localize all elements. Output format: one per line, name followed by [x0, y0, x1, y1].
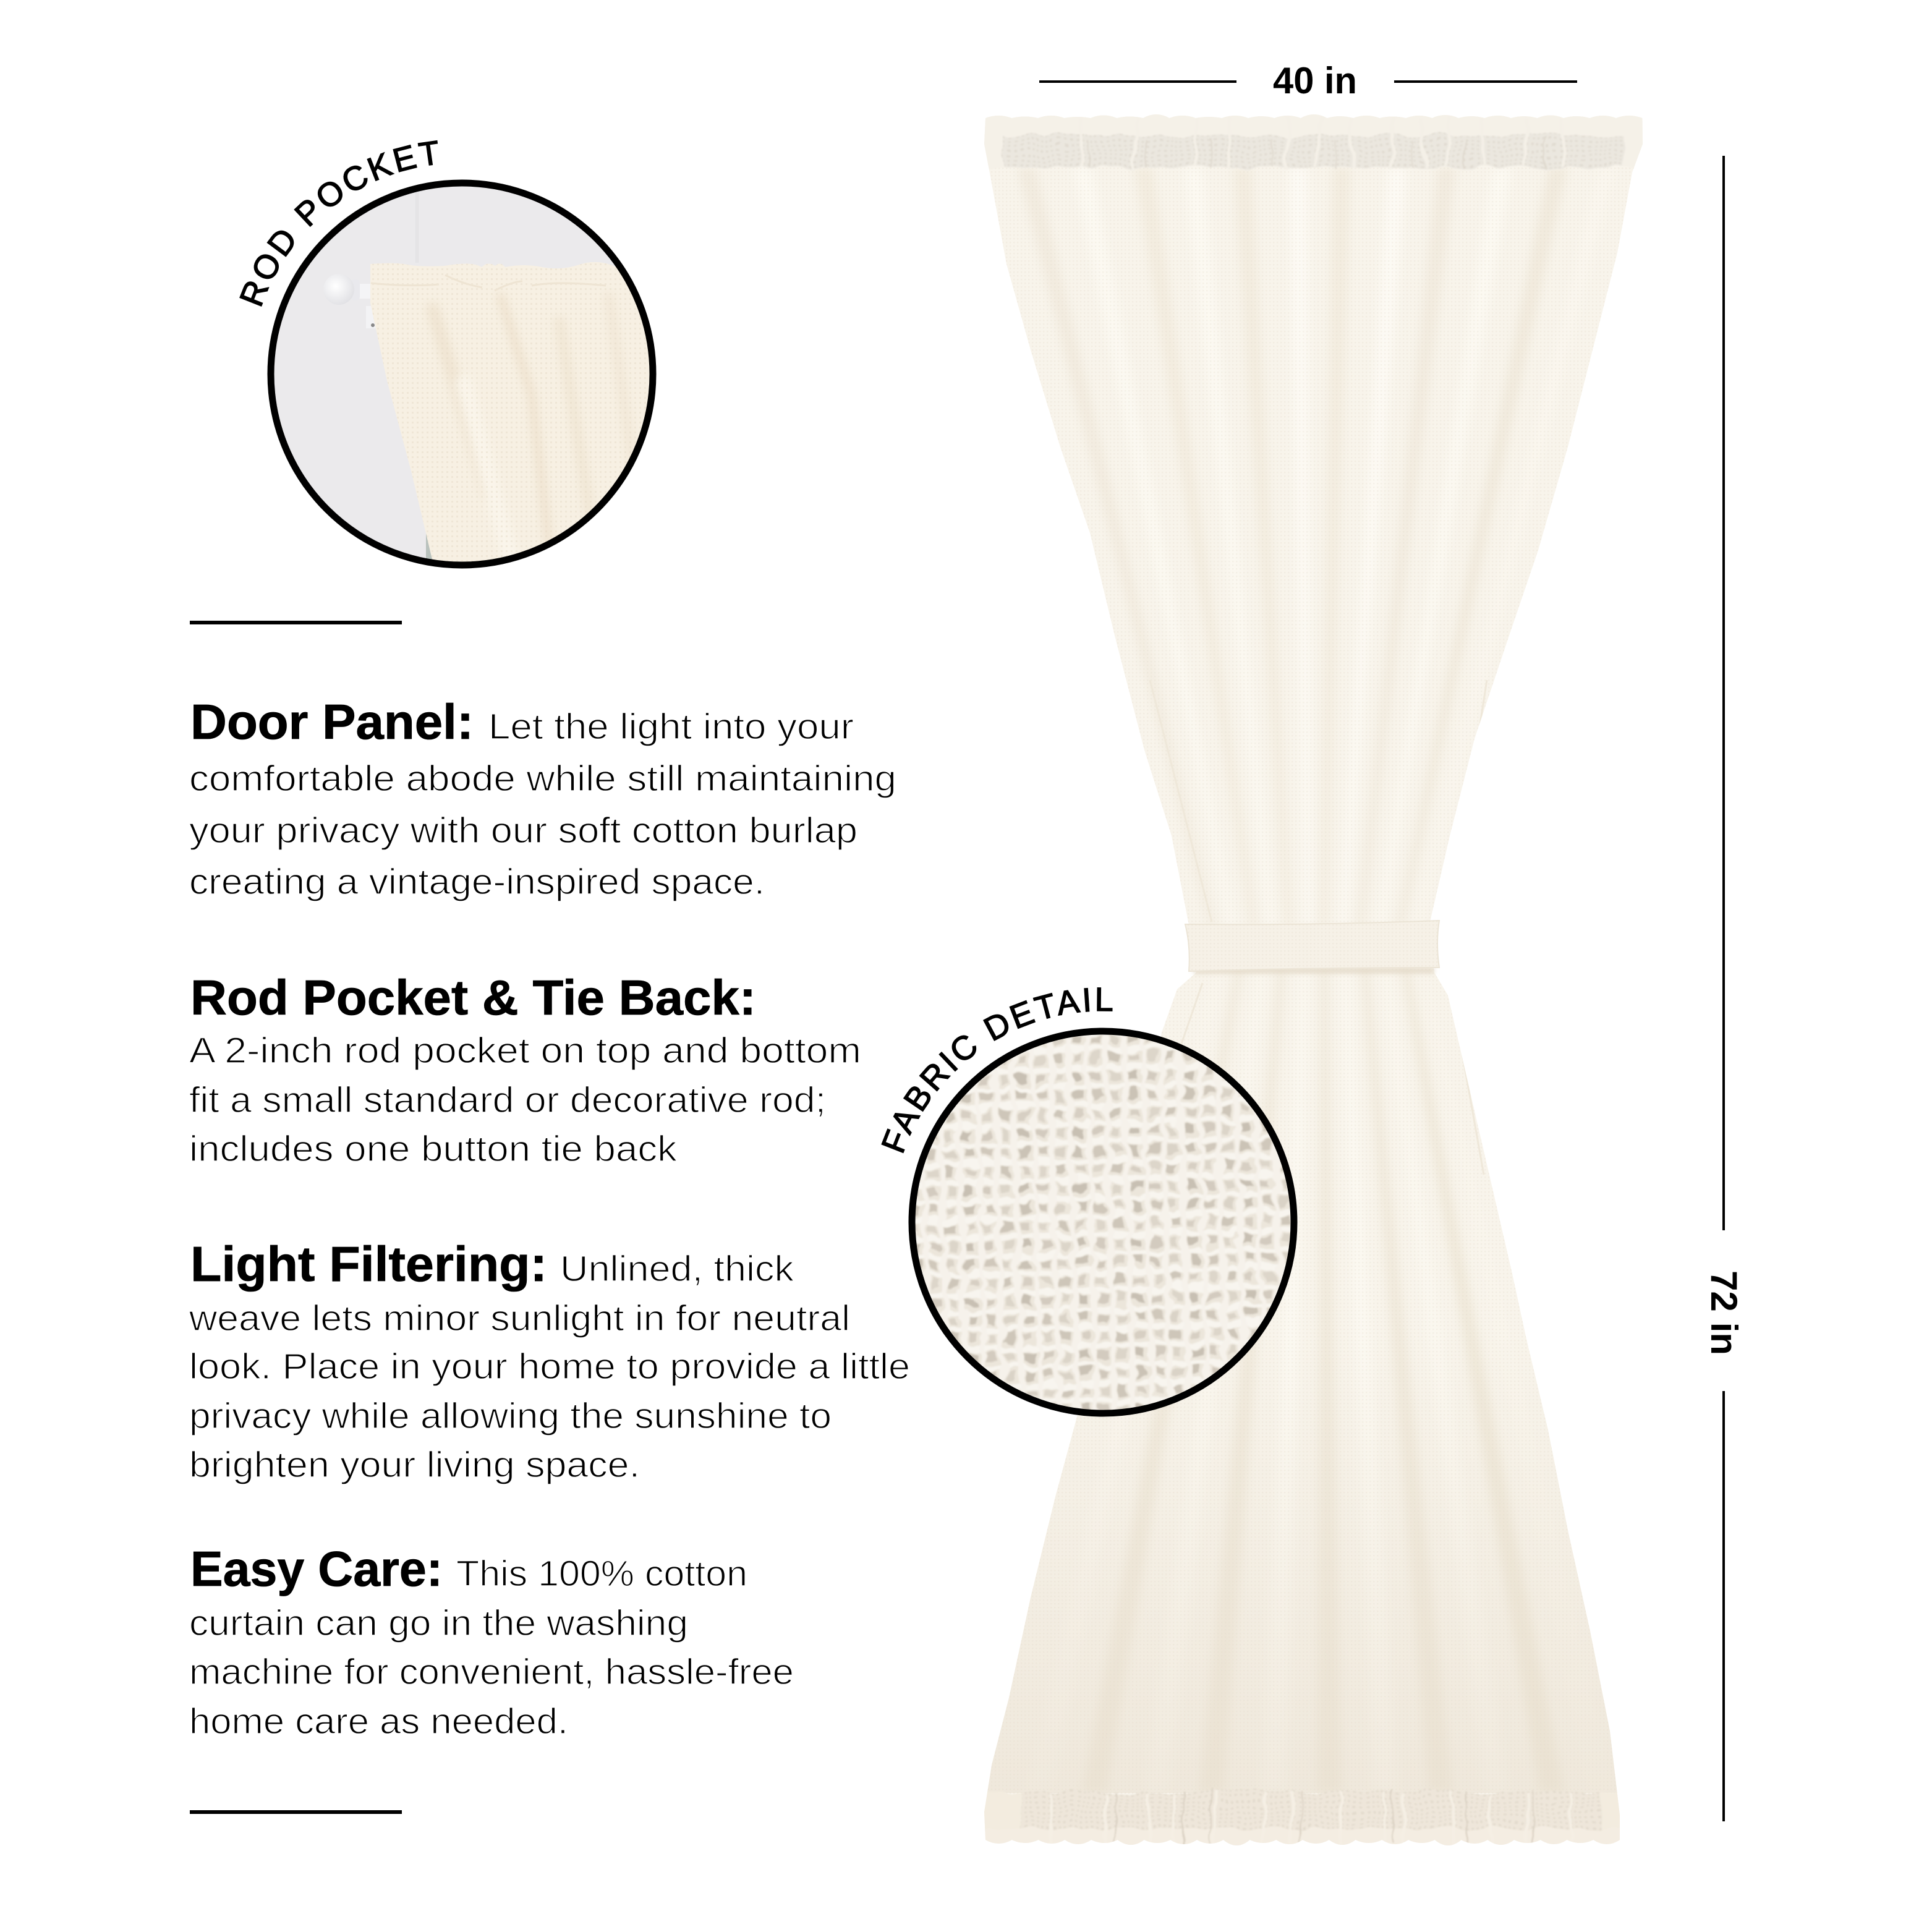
description: Easy Care: This 100% cotton — [456, 1554, 747, 1594]
fabric weave texture — [991, 168, 1633, 1794]
height dimension: 72 in: 72 in — [1703, 1270, 1745, 1355]
divider bottom — [190, 1810, 402, 1814]
description: Door Panel: Let the light into your — [488, 707, 854, 747]
label: FABRIC DETAIL: FABRIC DETAIL — [881, 987, 1113, 1154]
description: Light Filtering: weave lets minor sunlight in for neutral — [189, 1298, 850, 1338]
bottom rod pocket hem — [984, 1788, 1620, 1845]
description: Rod Pocket and Tie Back — [189, 1031, 861, 1169]
rod pocket curtain fabric — [370, 262, 666, 575]
lower drape folds — [1093, 976, 1557, 1788]
description: Easy Care: home care as needed. — [189, 1701, 568, 1742]
heading: Easy Care: Easy Care: — [190, 1541, 443, 1596]
side creases — [1150, 680, 1487, 1175]
label: ROD POCKET: ROD POCKET — [239, 140, 438, 307]
description: Light Filtering — [189, 1249, 910, 1485]
upper drape folds — [1023, 169, 1564, 816]
description: Rod Pocket and Tie Back: A 2-inch rod pocket on top and bottom — [189, 1031, 861, 1071]
text block: Rod Pocket and Tie Back — [189, 970, 861, 1169]
woven burlap texture — [890, 1008, 1323, 1440]
text block: Door Panel — [189, 694, 896, 902]
description: Easy Care — [189, 1554, 794, 1742]
description: Easy Care: machine for convenient, hassle-free — [189, 1652, 794, 1692]
circle inset: rod pocket photo — [266, 179, 666, 575]
description: Door Panel: your privacy with our soft cotton burlap — [189, 811, 857, 851]
circle inset: fabric detail — [890, 1008, 1323, 1440]
description: Rod Pocket and Tie Back: fit a small standard or decorative rod; — [189, 1080, 826, 1120]
circle border — [271, 183, 653, 565]
divider top — [190, 621, 402, 624]
heading: Light Filtering: Light Filtering: — [190, 1236, 547, 1292]
description: Door Panel — [189, 707, 896, 902]
circle border — [912, 1031, 1294, 1413]
description: Easy Care: curtain can go in the washing — [189, 1603, 688, 1643]
top rod pocket band — [1001, 132, 1625, 170]
lower shading — [988, 1525, 1617, 1793]
window strip — [426, 529, 439, 575]
text block: Light Filtering — [189, 1236, 910, 1485]
curtain rod with finial — [323, 274, 377, 328]
description: Light Filtering: privacy while allowing the sunshine to — [189, 1396, 832, 1436]
height dimension: 72 in — [1703, 156, 1745, 1821]
description: Door Panel: creating a vintage-inspired space. — [189, 862, 765, 902]
description: Light Filtering: brighten your living space. — [189, 1445, 640, 1485]
width dimension: 40 in: 40 in — [1273, 60, 1357, 101]
text block: Easy Care — [189, 1541, 794, 1742]
description: Light Filtering: look. Place in your home to provide a little — [189, 1347, 910, 1387]
width dimension: 40 in — [1039, 60, 1577, 101]
heading: Rod Pocket and Tie Back: Rod Pocket & Tie Back: — [190, 970, 756, 1025]
wall background — [266, 179, 662, 575]
curtain panel — [952, 105, 1669, 1866]
description: Light Filtering: Unlined, thick — [560, 1249, 794, 1289]
description: Rod Pocket and Tie Back: includes one button tie back — [189, 1129, 678, 1169]
heading: Door Panel: Door Panel: — [190, 694, 474, 749]
description: Door Panel: comfortable abode while still maintaining — [189, 759, 896, 799]
tie back band — [1185, 921, 1439, 971]
